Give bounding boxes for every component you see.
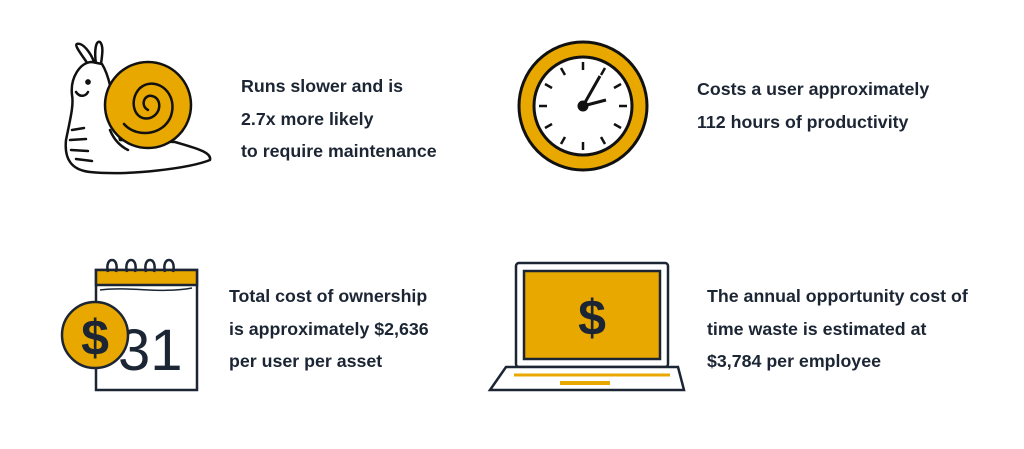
text: laptop: The annual opportunity cost of xyxy=(707,286,968,306)
text: snail: 2.7x more likely xyxy=(241,108,373,128)
text: clock: 112 hours of productivity xyxy=(697,112,908,132)
icon: calendar with coin: $ xyxy=(81,310,109,366)
icon: snail xyxy=(66,42,210,173)
icon: laptop: $ xyxy=(578,290,606,346)
text: laptop: $3,784 per employee xyxy=(707,351,881,371)
icon: laptop xyxy=(490,263,684,390)
text: snail: to require maintenance xyxy=(241,141,437,161)
text: laptop xyxy=(707,286,968,371)
text: calendar: per user per asset xyxy=(229,351,382,371)
icon: clock xyxy=(519,42,647,170)
text: calendar: Total cost of ownership xyxy=(229,286,427,306)
text: laptop: time waste is estimated at xyxy=(707,318,926,338)
icon: calendar with coin: 31 xyxy=(118,318,183,383)
text: clock xyxy=(697,79,930,132)
icon: calendar with coin xyxy=(62,260,197,390)
text: calendar: is approximately $2,636 xyxy=(229,318,429,338)
text: snail: Runs slower and is xyxy=(241,76,403,96)
text: calendar xyxy=(229,286,429,371)
text: clock: Costs a user approximately xyxy=(697,79,929,99)
text: snail xyxy=(241,76,437,161)
